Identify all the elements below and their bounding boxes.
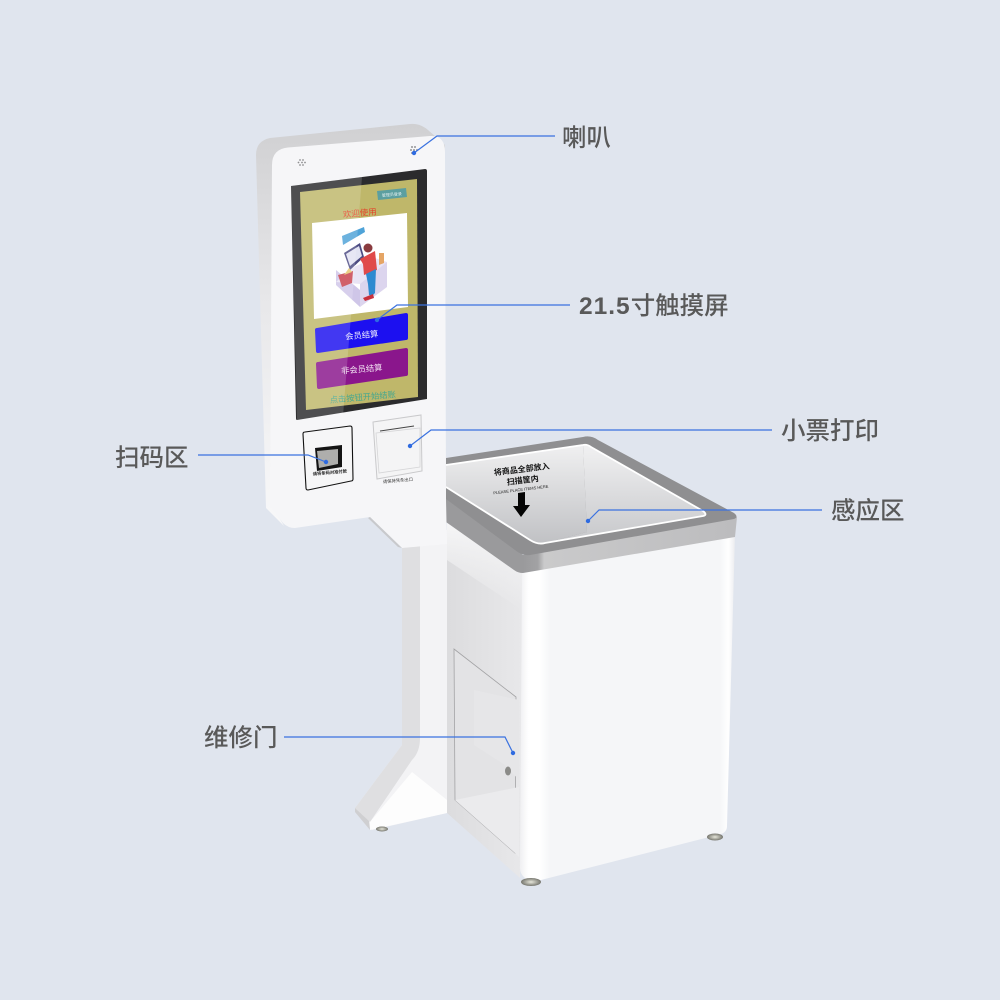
callout: sensing area: 感应区: [831, 497, 904, 525]
touch screen: [291, 169, 427, 420]
callout: receipt printing: 小票打印: [781, 417, 879, 445]
receipt printer: 请保持凭条出口: [383, 476, 413, 485]
receipt printer: [373, 415, 422, 485]
callout: scan area: [115, 444, 328, 472]
bin instruction: PLEASE PLACE ITEMS HERE: [493, 484, 549, 495]
screen tag: [377, 188, 407, 200]
non-member button: [316, 348, 408, 389]
icon: down arrow: [513, 492, 530, 517]
kiosk stand: [355, 530, 447, 832]
callout: touch screen: 21.5寸触摸屏: [579, 292, 729, 320]
screen tag: 管理员登录: [382, 190, 402, 198]
screen hint: 点击按钮开始结账: [329, 389, 396, 405]
bin front face: [520, 534, 735, 881]
bin instruction: 扫描筐内: [506, 473, 539, 487]
foot right: [707, 834, 723, 840]
scan area: [303, 426, 353, 490]
callout: speaker: [412, 124, 611, 155]
callout: maintenance door: [204, 724, 515, 755]
screen glare: [291, 177, 362, 420]
member button: [315, 313, 408, 353]
member button: 会员结算: [345, 329, 379, 341]
callout: receipt printing: [408, 417, 879, 448]
bin instruction: [493, 461, 550, 517]
foot left: [521, 878, 541, 886]
callout: maintenance door: 维修门: [204, 724, 278, 752]
callout: speaker: 喇叭: [562, 124, 611, 152]
rim side band: [446, 498, 737, 573]
bin instruction: 将商品全部放入: [493, 461, 550, 477]
non-member button: 非会员结算: [341, 362, 383, 376]
icon: right speaker: [410, 146, 418, 154]
screen illustration: [312, 213, 408, 319]
scan area: 请将条码对准付款: [312, 467, 348, 477]
rim top: [446, 436, 736, 555]
bin side face: [447, 515, 523, 878]
maintenance door: [454, 649, 519, 857]
callout: sensing area: [586, 497, 904, 525]
panel side: [256, 124, 445, 526]
sensing bin: [446, 436, 737, 886]
scanner window: [315, 445, 342, 471]
kiosk display panel: [256, 124, 447, 548]
screen title: 欢迎使用: [342, 207, 377, 219]
callout: scan area: 扫码区: [115, 444, 188, 472]
bin interior: [446, 445, 706, 544]
icon: left speaker: [298, 159, 306, 166]
callout: touch screen: [375, 292, 729, 322]
